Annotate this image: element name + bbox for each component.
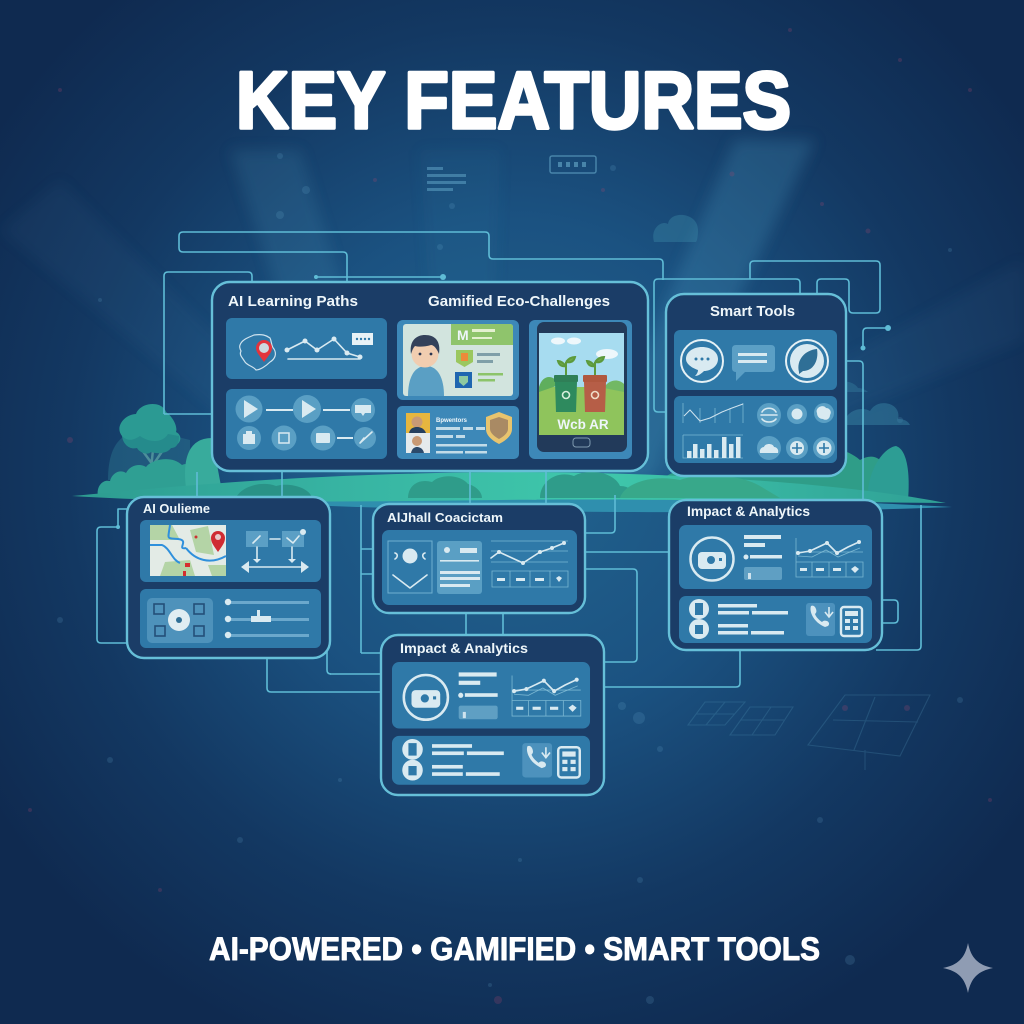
analytics cards xyxy=(679,525,872,643)
ground xyxy=(72,472,946,503)
heading: AI Learning Paths: AI Learning Paths xyxy=(228,293,358,310)
dashboard card xyxy=(382,530,577,605)
middle bushes xyxy=(236,472,780,498)
faint solar panels xyxy=(688,695,930,770)
learning path steps card xyxy=(226,389,387,459)
charts and mini icons card xyxy=(674,396,837,463)
map and flow card xyxy=(140,520,321,582)
tagline: AI-POWERED • GAMIFIED • SMART TOOLS xyxy=(209,931,820,967)
panel: Impact & Analytics (right) xyxy=(669,500,882,650)
water band xyxy=(250,498,952,512)
heading: Gamified Eco-Challenges: Gamified Eco-Challenges xyxy=(428,293,610,310)
learning path map card xyxy=(226,318,387,379)
panel: AIJhall Coacictam xyxy=(373,504,585,613)
heading: Impact & Analytics: Impact & Analytics xyxy=(400,640,528,656)
left bushes xyxy=(98,459,214,497)
connector lines xyxy=(97,232,921,692)
particles xyxy=(57,153,963,1004)
tree shadow xyxy=(108,430,190,490)
faint password box icon xyxy=(550,156,596,173)
phone with AR recycling bins xyxy=(529,320,632,459)
profile card: M xyxy=(457,327,469,343)
title: KEY FEATURES xyxy=(236,56,791,146)
leaderboard card xyxy=(397,406,519,459)
right bushes xyxy=(660,450,890,496)
icon: sparkle xyxy=(943,943,993,993)
panel: AI Oulieme xyxy=(127,497,330,658)
background clouds xyxy=(653,215,910,425)
left tree xyxy=(119,404,180,478)
controls and sliders card xyxy=(140,589,321,648)
light rays xyxy=(0,140,1024,480)
heading: Smart Tools: Smart Tools xyxy=(710,303,795,320)
analytics cards xyxy=(392,662,590,785)
panel: Impact & Analytics (bottom) xyxy=(381,635,604,795)
heading: AIJhall Coacictam: AlJhall Coacictam xyxy=(387,510,503,525)
faint menu icon xyxy=(427,167,466,191)
heading: AI Oulieme: AI Oulieme xyxy=(143,501,210,516)
chat and leaf icons card xyxy=(674,330,837,390)
heading: Impact & Analytics: Impact & Analytics xyxy=(687,504,810,519)
panel: Smart Tools xyxy=(666,294,846,476)
panel: AI learning paths and gamified eco-challenges xyxy=(212,282,648,471)
phone with AR recycling bins: Wcb AR xyxy=(557,417,609,432)
landscape xyxy=(72,404,952,512)
leaderboard card: Bpwentors xyxy=(436,417,467,424)
profile card xyxy=(397,320,519,400)
